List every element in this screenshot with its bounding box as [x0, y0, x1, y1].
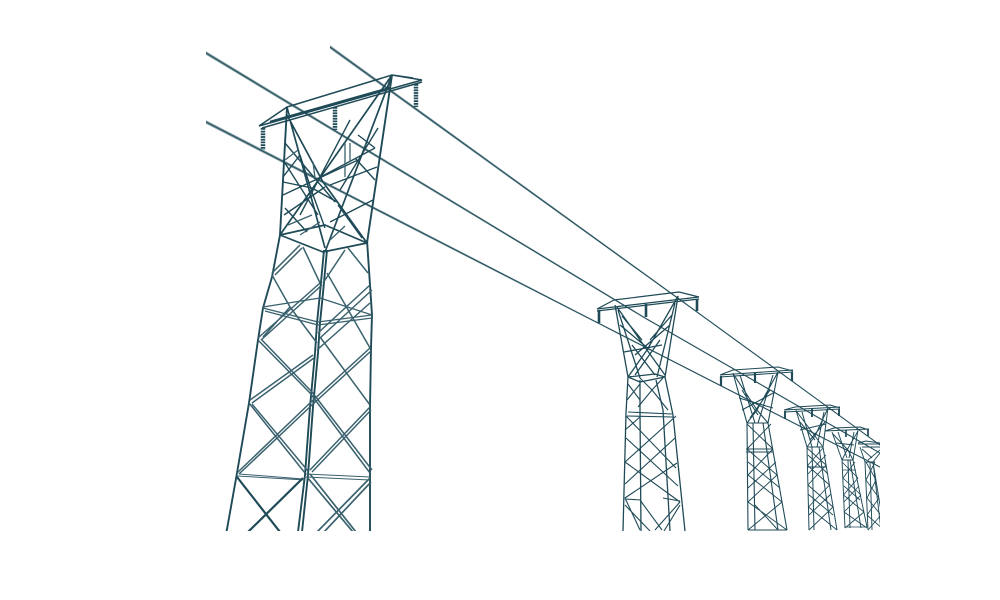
tower 6: far pylon, cropped at right edge: [858, 440, 880, 530]
tower 2 lower bracing: [625, 378, 680, 531]
tower 1 lattice bracing: [237, 245, 372, 532]
tower 1: foreground pylon: [226, 75, 422, 532]
power lines: [206, 45, 880, 468]
tower 2 insulators: [599, 299, 697, 323]
tower 2 legs: [615, 296, 685, 531]
tower 1 insulators: [263, 84, 416, 150]
tower 3: pylon: [720, 367, 793, 530]
tower 1 crossarm: [259, 75, 422, 128]
tower 1 lower legs: [226, 235, 372, 532]
tower 1 faint cage members: [285, 142, 350, 240]
tower 1 upper cage: [280, 75, 392, 252]
tower 2 crossarm: [597, 292, 699, 311]
tower 2: mid-distance pylon: [597, 292, 699, 531]
tower 4: pylon: [784, 405, 840, 530]
tower 5: pylon: [825, 427, 869, 528]
tower 2 upper bracing: [617, 296, 678, 378]
